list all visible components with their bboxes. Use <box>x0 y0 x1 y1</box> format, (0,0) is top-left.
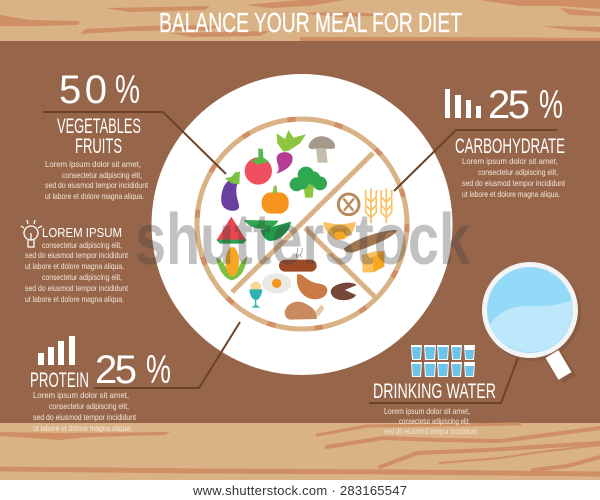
icon: pumpkin <box>262 186 289 214</box>
section: vegetables and fruits: ut labore et dolore magna aliqua. <box>45 191 144 201</box>
section: protein <box>30 336 171 433</box>
icon: baguette <box>344 230 397 252</box>
icon: cucumbers <box>244 220 291 241</box>
section: drinking water <box>373 345 496 436</box>
title: BALANCE YOUR MEAL FOR DIET <box>159 7 462 38</box>
icon: ten glasses of water <box>411 345 475 377</box>
icon: falling bars <box>445 89 481 118</box>
icon: steam <box>296 248 302 258</box>
icon: sausage <box>279 260 317 272</box>
icon: steak <box>297 274 327 299</box>
icon: salmon <box>331 283 357 300</box>
section: carbohydrate: Lorem ipsum dolor sit amet, <box>462 156 558 166</box>
icon: wheat <box>366 188 392 223</box>
section: vegetables and fruits: Lorem ipsum dolor sit amet, <box>45 159 141 169</box>
section: vegetables and fruits: FRUITS <box>75 135 122 158</box>
section: carbohydrate <box>445 83 566 199</box>
section: protein: 25 <box>95 348 137 392</box>
section: carbohydrate: ut labore et dolore magna aliqua. <box>462 189 560 199</box>
icon: glass of water from above <box>482 262 581 379</box>
section: drinking water: consectetur adipiscing elit, <box>399 416 470 426</box>
plate <box>152 74 452 375</box>
icon: egg cup <box>249 282 262 308</box>
section: vegetables and fruits: % <box>115 68 140 112</box>
icon: corn <box>216 247 247 280</box>
icon: mushroom <box>308 136 335 163</box>
brown panel <box>0 40 600 424</box>
section: vegetables and fruits: VEGETABLES <box>57 115 141 138</box>
icon: light bulb <box>21 220 42 247</box>
top wood band <box>0 0 600 41</box>
section: lorem ipsum: ut labore et dolore magna aliqua. <box>25 294 124 304</box>
watermark: shutterstock <box>135 200 471 280</box>
icon: watermelon <box>216 217 247 244</box>
plate ring and dividers <box>197 119 407 329</box>
section: protein: sed do eiusmod tempor incididunt <box>33 412 137 422</box>
icon: beetroot <box>276 130 306 174</box>
section: vegetables and fruits: consectetur adipiscing elit, <box>62 170 142 180</box>
section: drinking water: DRINKING WATER <box>373 380 496 403</box>
section: lorem ipsum: sed do eiusmod tempor incididunt <box>25 283 129 293</box>
icon: bread <box>362 251 384 272</box>
bottom wood band <box>0 423 600 480</box>
section: protein: Lorem ipsum dolor sit amet, <box>33 390 129 400</box>
section: vegetables and fruits <box>45 68 149 201</box>
food icons <box>216 130 397 320</box>
section: protein: % <box>146 348 171 392</box>
section: protein: consectetur adipiscing elit, <box>49 401 129 411</box>
section: lorem ipsum: LOREM IPSUM <box>42 225 122 240</box>
leader lines <box>43 112 557 403</box>
section: carbohydrate: sed do eiusmod tempor incididunt <box>462 178 566 188</box>
icon: broccoli <box>290 167 327 198</box>
section: drinking water: Lorem ipsum dolor sit amet, <box>384 406 470 416</box>
section: carbohydrate: consectetur adipiscing elit, <box>478 167 558 177</box>
source footer: www.shutterstock.com · 283165547 <box>192 483 407 498</box>
section: lorem ipsum: sed do eiusmod tempor incididunt <box>25 250 129 260</box>
section: lorem ipsum <box>21 220 129 304</box>
icon: rising bars <box>38 336 75 365</box>
icon: fried egg <box>262 273 291 293</box>
section: lorem ipsum: consectetur adipiscing elit, <box>42 240 122 250</box>
icon: croissant <box>323 222 355 240</box>
section: vegetables and fruits: sed do eiusmod tempor incididunt <box>45 180 149 190</box>
icon: chicken <box>285 302 324 320</box>
section: lorem ipsum: consectetur adipiscing elit, <box>42 272 122 282</box>
section: carbohydrate: % <box>539 83 563 127</box>
section: carbohydrate: 25 <box>488 83 530 127</box>
section: lorem ipsum: ut labore et dolore magna aliqua. <box>25 261 124 271</box>
icon: tomato <box>245 148 272 185</box>
section: protein: PROTEIN <box>30 369 89 392</box>
icon: eggplant <box>221 172 240 211</box>
icon: pretzel <box>338 194 359 215</box>
section: drinking water: sed do eiusmod tempor incididunt <box>384 426 477 436</box>
section: protein: ut labore et dolore magna aliqua. <box>33 423 132 433</box>
section: vegetables and fruits: 50 <box>59 68 107 112</box>
